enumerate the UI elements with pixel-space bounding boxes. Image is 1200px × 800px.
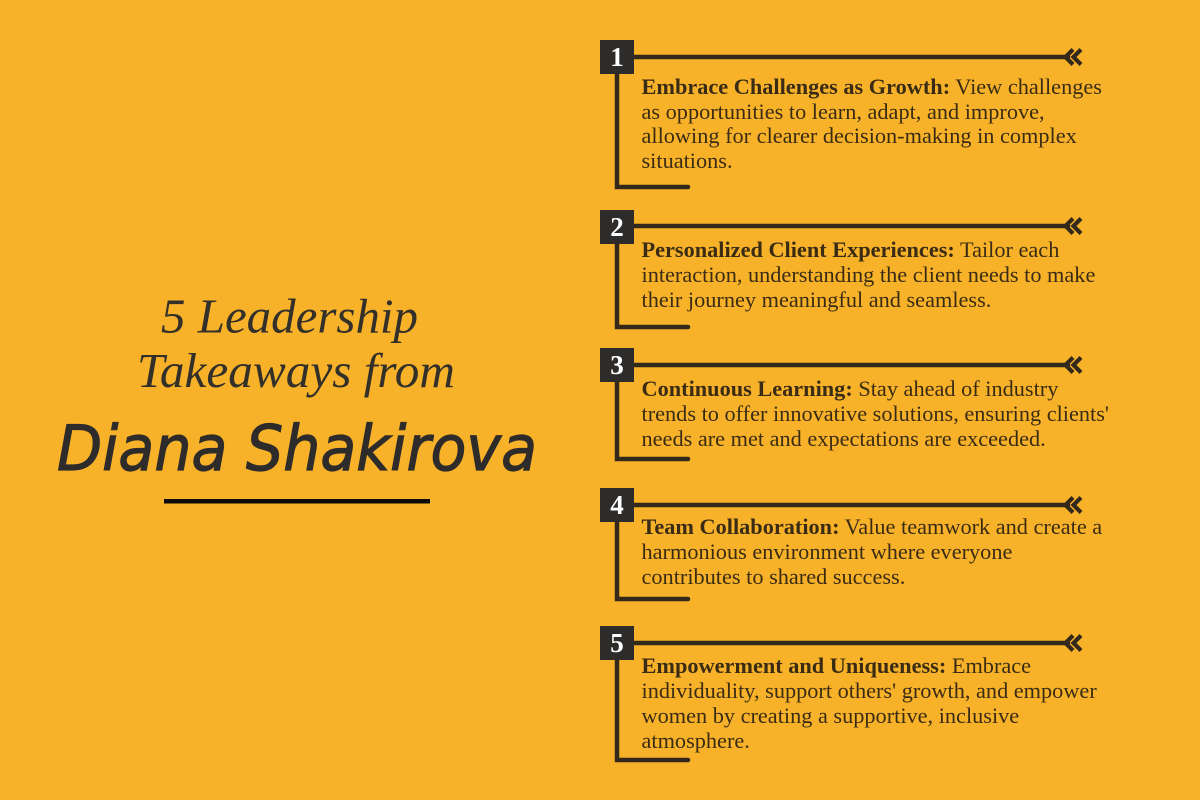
number badge 1: 1: [610, 42, 624, 72]
connector lines 3: [617, 365, 1068, 459]
text block 4: contributes to shared success.: [642, 564, 905, 589]
icon: chevrons 1: [1066, 50, 1081, 64]
panel: takeaway 1: [600, 40, 1102, 187]
text block 4: Team Collaboration: Value teamwork and create a: [642, 514, 1102, 539]
text block 2: [642, 237, 1095, 312]
number badge 1: [600, 40, 634, 74]
panel: takeaway 5: [600, 626, 1097, 760]
title name: Diana Shakirova: Diana Shakirova: [57, 412, 537, 485]
text block 3: trends to offer innovative solutions, ensuring clients': [642, 401, 1109, 426]
text block 2: interaction, understanding the client needs to make: [642, 262, 1095, 287]
number badge 2: [600, 210, 634, 244]
text block 4: [642, 514, 1102, 589]
text block 4: harmonious environment where everyone: [642, 539, 1012, 564]
title underline: [164, 499, 430, 504]
text block 1: Embrace Challenges as Growth: View challenges: [642, 74, 1102, 99]
number badge 4: 4: [610, 490, 624, 520]
icon: chevrons 5: [1066, 636, 1081, 650]
number badge 2: 2: [610, 212, 624, 242]
text block 3: needs are met and expectations are exceeded.: [642, 426, 1046, 451]
connector lines 4: [617, 505, 1068, 599]
text block 5: Empowerment and Uniqueness: Embrace: [642, 653, 1031, 678]
number badge 3: [600, 348, 634, 382]
text block 1: situations.: [642, 148, 733, 173]
title line: Takeaways from: Takeaways from: [137, 343, 455, 398]
connector lines 1: [617, 57, 1068, 187]
text block 3: Continuous Learning: Stay ahead of industry: [642, 376, 1059, 401]
text block 1: allowing for clearer decision-making in complex: [642, 123, 1077, 148]
panel: takeaway 3: [600, 348, 1109, 459]
text block 1: as opportunities to learn, adapt, and improve,: [642, 99, 1045, 124]
text block 3: [642, 376, 1109, 451]
text block 5: women by creating a supportive, inclusive: [642, 703, 1019, 728]
title: [57, 288, 537, 504]
text block 5: atmosphere.: [642, 728, 750, 753]
number badge 5: 5: [610, 628, 624, 658]
connector lines 5: [617, 643, 1068, 760]
icon: chevrons 2: [1066, 218, 1081, 234]
text block 2: their journey meaningful and seamless.: [642, 287, 991, 312]
text block 1: [642, 74, 1102, 173]
icon: chevrons 4: [1066, 498, 1081, 512]
text block 5: individuality, support others' growth, and empower: [642, 678, 1097, 703]
panel: takeaway 2: [600, 210, 1095, 327]
title line: 5 Leadership: 5 Leadership: [161, 288, 418, 344]
connector lines 2: [617, 226, 1068, 327]
number badge 4: [600, 488, 634, 522]
text block 5: [642, 653, 1097, 753]
number badge 3: 3: [610, 350, 624, 380]
text block 2: Personalized Client Experiences: Tailor each: [642, 237, 1059, 262]
panel: takeaway 4: [600, 488, 1102, 599]
icon: chevrons 3: [1066, 358, 1081, 372]
number badge 5: [600, 626, 634, 660]
